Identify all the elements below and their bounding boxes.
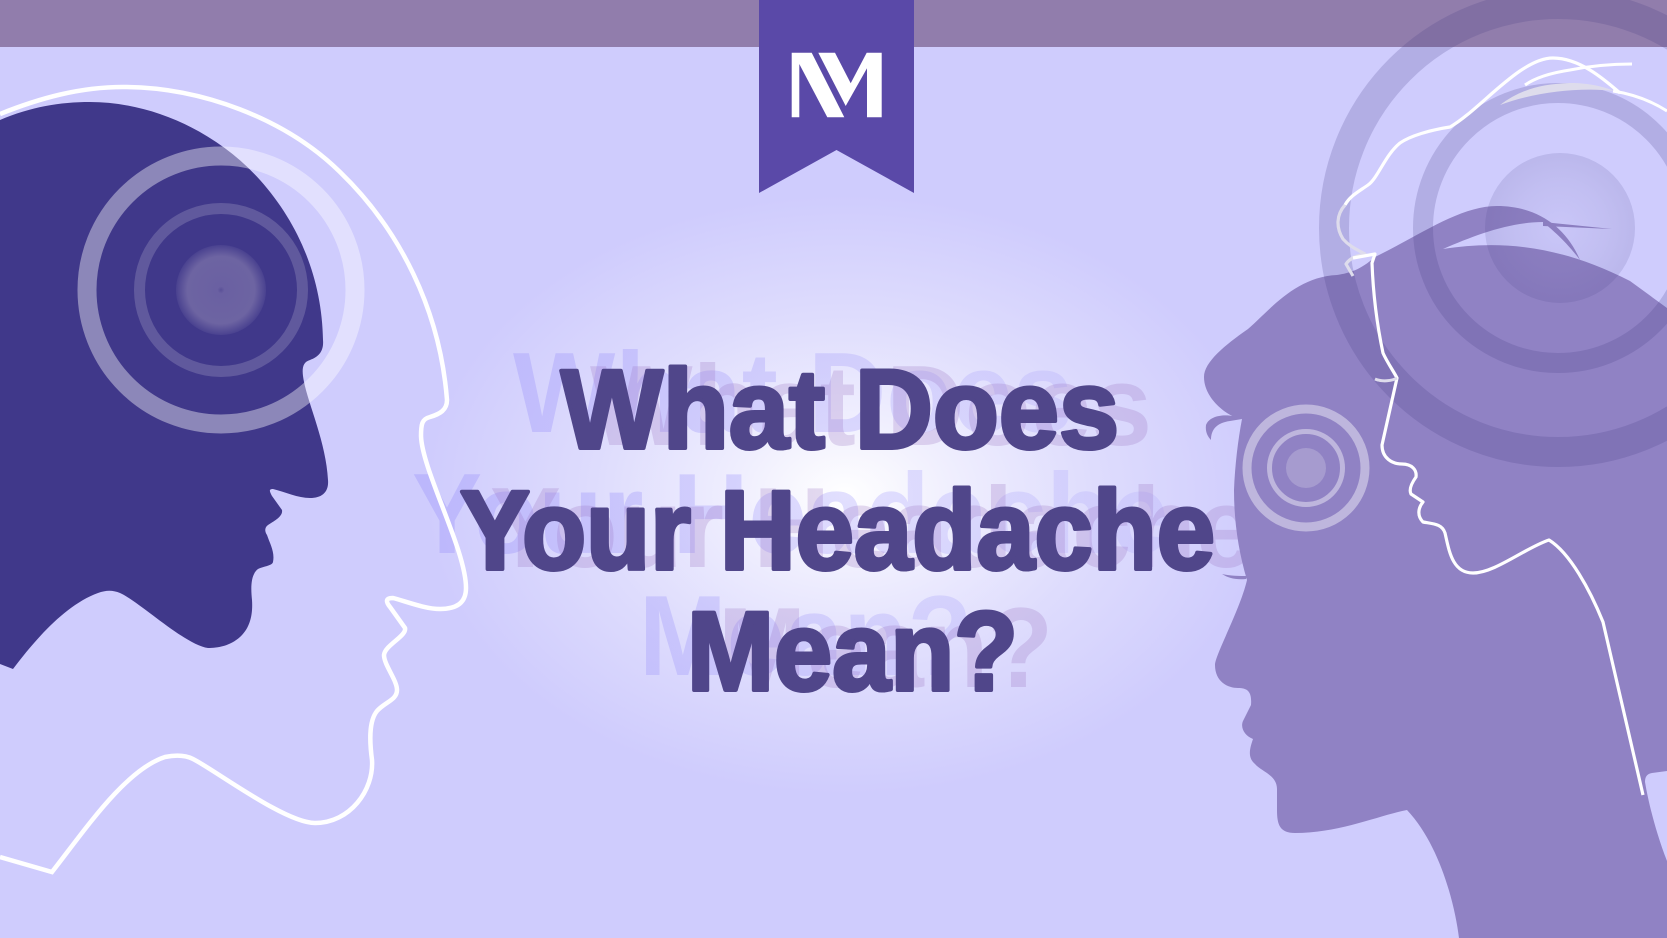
ghost title: mauve layer: Mean? — [718, 585, 1053, 712]
left head white outline — [0, 87, 466, 872]
right head white outline — [1338, 58, 1667, 795]
right head silhouette — [1204, 206, 1667, 938]
logo: NM monogram — [792, 53, 882, 117]
title — [460, 347, 1215, 714]
ghost title: blue layer: What Does — [513, 330, 1073, 457]
title: Your Headache — [460, 468, 1215, 593]
ghost title: mauve layer — [490, 343, 1255, 712]
title: Mean? — [687, 589, 1018, 714]
ghost title: blue layer — [412, 330, 1169, 700]
ghost title: mauve layer: Your Headache — [490, 465, 1255, 592]
left head silhouette — [0, 102, 328, 669]
right head large pain rings — [1334, 4, 1667, 452]
ghost title: blue layer: Your Headache — [412, 451, 1169, 578]
ghost title: mauve layer: What Does — [590, 343, 1152, 470]
central glow — [400, 180, 1300, 810]
left head pain rings — [87, 156, 355, 424]
ghost title: blue layer: Mean? — [639, 573, 972, 700]
title: What Does — [561, 347, 1119, 472]
ribbon banner — [759, 0, 914, 193]
right head small pain rings — [1247, 409, 1365, 527]
top bar — [0, 0, 1667, 47]
